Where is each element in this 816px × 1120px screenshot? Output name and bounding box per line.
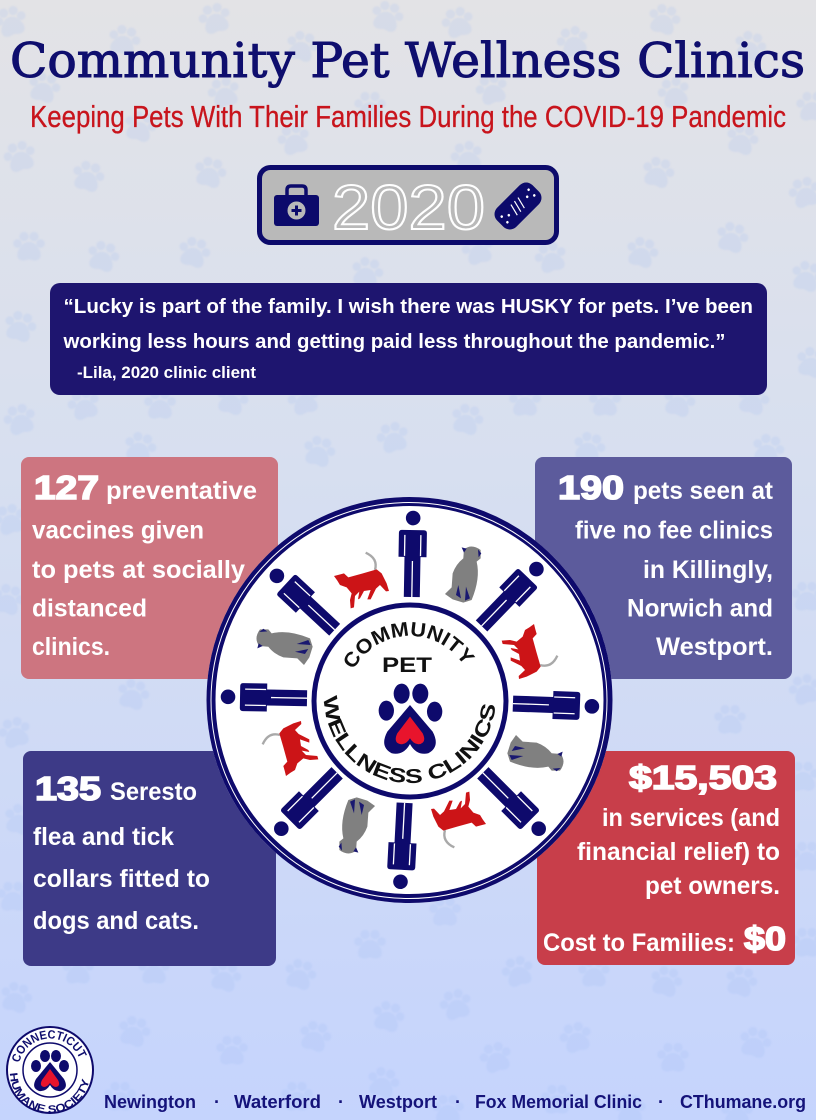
humane society logo: HUMANE SOCIETY [10,1073,88,1112]
panel: financial relief: financial relief) to [577,838,780,866]
quote text line 2: working less hours and getting paid less throughout the pandemic.” [62,331,725,353]
people ring [220,510,600,890]
panel: flea collars: dogs and cats. [33,907,199,935]
panel: flea collars: 135 [35,770,101,807]
panel: pets seen: in Killingly, [643,556,773,584]
quote attribution: -Lila, 2020 clinic client [77,364,257,382]
footer locations [104,1092,806,1112]
panel: vaccines: preventative [106,477,257,505]
panel: vaccines: distanced [32,594,147,622]
footer locations: Westport [359,1092,437,1112]
panel: pets seen: Westport. [656,633,773,661]
year 2020: 2020 [332,173,485,243]
panel: pets seen: Norwich and [627,594,773,622]
panel: financial relief [537,751,795,965]
panel: flea collars [23,751,276,966]
panel: vaccines: 127 [34,469,99,506]
panel: financial relief: $0 [744,920,786,957]
humane society logo [6,1026,94,1114]
panel: financial relief: Cost to Families: [543,929,735,957]
panel: financial relief: pet owners. [645,872,780,900]
quote panel [50,283,767,395]
gray dogs [256,546,564,854]
year badge [260,168,556,243]
quote text: “Lucky is part of the family. I wish there was HUSKY for pets. I’ve been [64,296,753,318]
footer locations: · [658,1092,664,1112]
panel: financial relief: in services (and [602,804,780,832]
icon: medical kit [274,186,319,226]
panel: financial relief: $15,503 [629,759,777,796]
panel: vaccines [21,457,278,679]
icon: bandage [491,179,545,233]
panel: flea collars: Seresto [110,778,197,806]
red cats [263,553,557,847]
footer locations: Newington [104,1092,196,1112]
panel: vaccines: to pets at socially [32,556,245,584]
panel: vaccines: vaccines given [32,516,204,544]
title: Community Pet Wellness Clinics [10,33,805,89]
footer locations: CThumane.org [680,1092,806,1112]
panel: vaccines: clinics. [32,633,110,661]
logo text bottom: WELLNESS CLINICS [324,695,495,784]
footer locations: · [338,1092,344,1112]
panel: pets seen [535,457,792,679]
footer locations: Waterford [234,1092,321,1112]
humane society logo: CONNECTICUT [12,1030,87,1062]
footer locations: · [455,1092,461,1112]
panel: pets seen: pets seen at [633,477,774,505]
logo text pet: PET [382,654,432,677]
panel: pets seen: five no fee clinics [575,516,773,544]
panel: pets seen: 190 [558,469,624,506]
logo text top: COMMUNITY [344,622,476,667]
panel: flea collars: flea and tick [33,823,174,851]
panel: flea collars: collars fitted to [33,865,210,893]
footer locations: Fox Memorial Clinic [475,1092,642,1112]
logo paw and heart [379,684,442,754]
clinic logo [206,497,612,903]
footer locations: · [214,1092,220,1112]
